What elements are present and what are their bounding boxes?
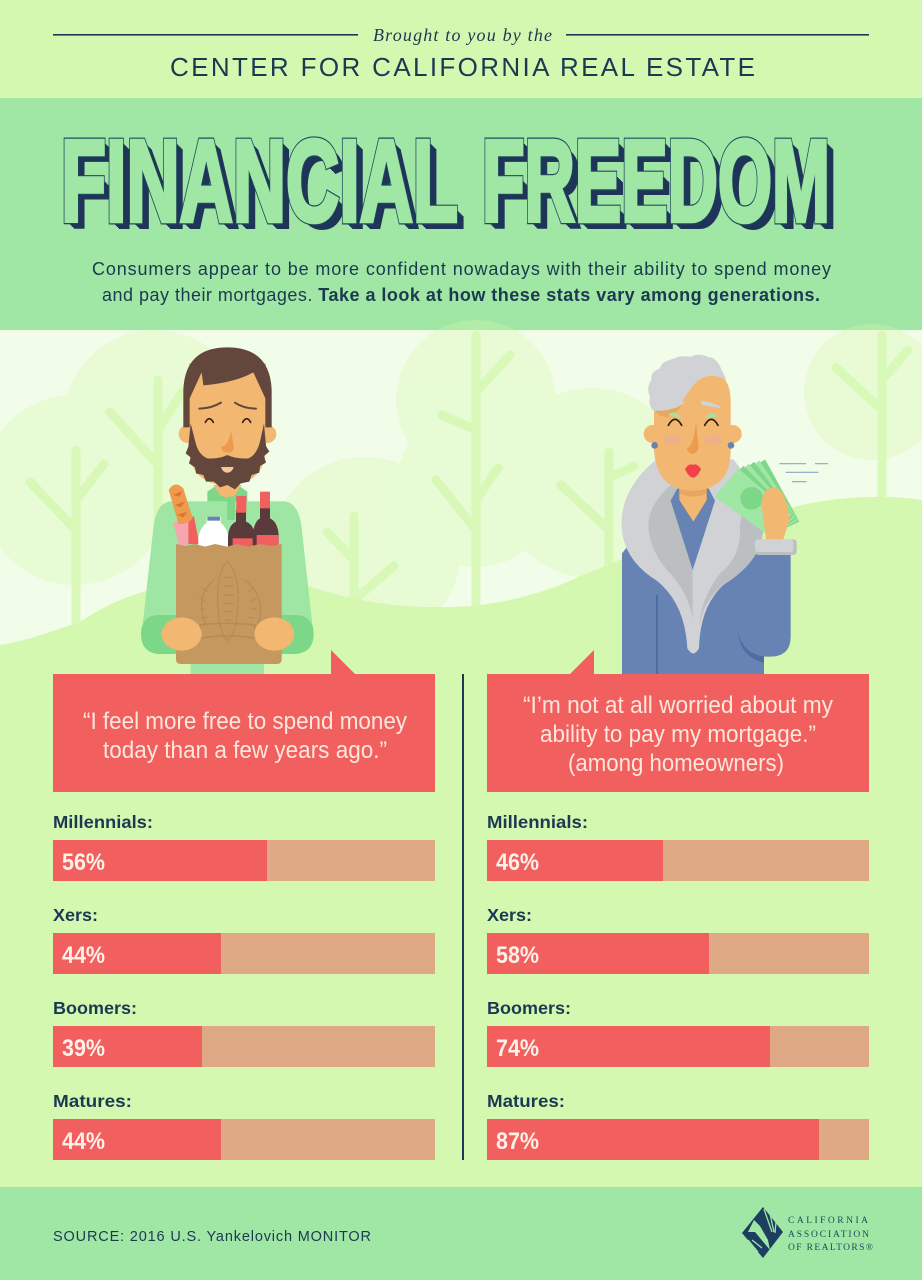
title: FINANCIAL FREEDOM: FINANCIAL — [61, 116, 458, 246]
left bar chart: 44% — [62, 942, 105, 969]
ears — [179, 425, 197, 443]
earrings — [651, 442, 658, 449]
hair — [648, 355, 727, 412]
left bar chart: Matures: — [53, 1091, 132, 1111]
bag emblem — [199, 562, 261, 641]
coat — [622, 527, 791, 675]
brows and eyes — [199, 403, 256, 409]
right bar chart: 46% — [496, 849, 539, 876]
logo — [742, 1207, 873, 1258]
intro text: and pay their mortgages. Take a look at how these stats vary among generations. — [102, 285, 820, 305]
speech bubble: right: ability to pay my mortgage.” — [540, 721, 816, 748]
neck — [679, 483, 707, 522]
right bar chart: Matures: — [487, 1091, 565, 1111]
footer band — [0, 1187, 922, 1280]
right bar chart: Millennials: — [487, 812, 588, 832]
woman with cash — [622, 355, 828, 675]
speech bubble: left: today than a few years ago.” — [103, 737, 387, 764]
paper bag — [176, 544, 282, 664]
left bar chart: Boomers: — [53, 998, 137, 1018]
left bar chart: 44% — [62, 1128, 105, 1155]
title: FINANCIAL FREEDOM — [61, 116, 834, 246]
speech bubble: right: (among homeowners) — [568, 750, 784, 777]
title: FINANCIAL FREEDOM: FREEDOM — [482, 116, 830, 246]
hair — [183, 347, 272, 427]
eyes — [668, 419, 718, 425]
title band background — [0, 98, 922, 330]
left bar chart — [53, 812, 435, 1160]
nose — [687, 420, 699, 454]
right bar chart: 58% — [496, 942, 539, 969]
ears — [644, 425, 662, 443]
head — [654, 373, 731, 491]
speech bubble: right — [487, 650, 869, 792]
fur collar — [622, 459, 763, 653]
bread — [173, 517, 188, 546]
header band: sponsor: Brought to you by the — [373, 25, 552, 45]
right bar chart: 74% — [496, 1035, 539, 1062]
trousers — [191, 660, 264, 675]
right bar chart — [487, 812, 869, 1160]
source: SOURCE: 2016 U.S. Yankelovich MONITOR — [53, 1229, 371, 1245]
beard — [186, 423, 269, 489]
title: FINANCIAL FREEDOM: FINANCIAL — [61, 116, 458, 246]
background forest scene — [0, 320, 922, 680]
hand — [761, 487, 789, 539]
right bar chart: Xers: — [487, 905, 532, 925]
hands — [162, 617, 202, 651]
left bar chart: Xers: — [53, 905, 98, 925]
man with grocery bag — [141, 347, 314, 675]
milk bottle — [198, 517, 228, 547]
eye shadow and brows — [668, 412, 717, 418]
right bar chart: 87% — [496, 1128, 539, 1155]
face — [189, 363, 266, 486]
speech bubble: left — [53, 650, 435, 792]
speech bubble: left: “I feel more free to spend money — [83, 708, 407, 735]
divider — [462, 674, 464, 1160]
intro text — [92, 259, 831, 305]
blouse — [671, 485, 715, 570]
motion lines — [779, 464, 828, 482]
logo: ASSOCIATION — [788, 1230, 869, 1240]
sleeve cuffs — [141, 615, 314, 654]
lips — [685, 464, 701, 478]
logo: CALIFORNIA — [788, 1216, 868, 1226]
left bar chart: 39% — [62, 1035, 105, 1062]
shirt — [142, 501, 313, 633]
left bar chart: Millennials: — [53, 812, 153, 832]
header band: sponsor — [53, 25, 869, 82]
header band: sponsor: CENTER FOR CALIFORNIA REAL ESTATE — [170, 52, 755, 82]
wine bottles — [228, 496, 255, 547]
cuff — [755, 539, 797, 555]
left bar chart: 56% — [62, 849, 105, 876]
neck and collar — [207, 485, 247, 501]
speech bubble: right: “I’m not at all worried about my — [523, 692, 833, 719]
blush — [664, 436, 681, 444]
banknotes — [715, 452, 815, 542]
intro text: Consumers appear to be more confident nowadays with their ability to spend money — [92, 259, 831, 279]
logo: OF REALTORS® — [788, 1242, 873, 1253]
title: FINANCIAL FREEDOM: FREEDOM — [482, 116, 830, 246]
right bar chart: Boomers: — [487, 998, 571, 1018]
nose — [221, 431, 234, 453]
